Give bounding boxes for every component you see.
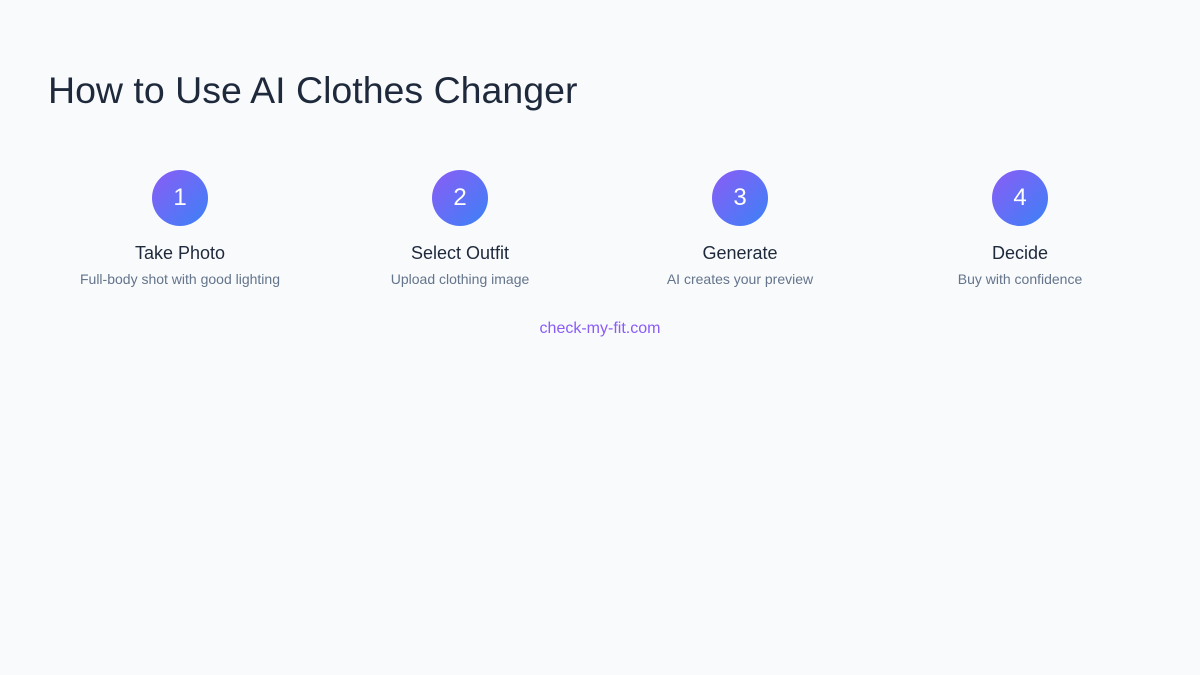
step 4	[958, 170, 1082, 287]
step 4: 4	[1013, 184, 1027, 211]
step 3: 3	[733, 184, 747, 211]
step 4: Decide	[992, 243, 1048, 263]
step 1: Take Photo	[135, 243, 225, 263]
step 3	[667, 170, 814, 287]
step 4: Buy with confidence	[958, 271, 1082, 287]
step 1: 1	[173, 184, 187, 211]
step 1	[80, 170, 280, 287]
step 1: Full-body shot with good lighting	[80, 271, 280, 287]
step 2: Upload clothing image	[391, 271, 529, 287]
step 2: 2	[453, 184, 467, 211]
step 2	[391, 170, 529, 287]
step 3: Generate	[702, 243, 778, 263]
title: How to Use AI Clothes Changer	[48, 69, 577, 111]
footer url: check-my-fit.com	[540, 320, 660, 337]
step 3: AI creates your preview	[667, 271, 813, 287]
step 2: Select Outfit	[411, 243, 509, 263]
